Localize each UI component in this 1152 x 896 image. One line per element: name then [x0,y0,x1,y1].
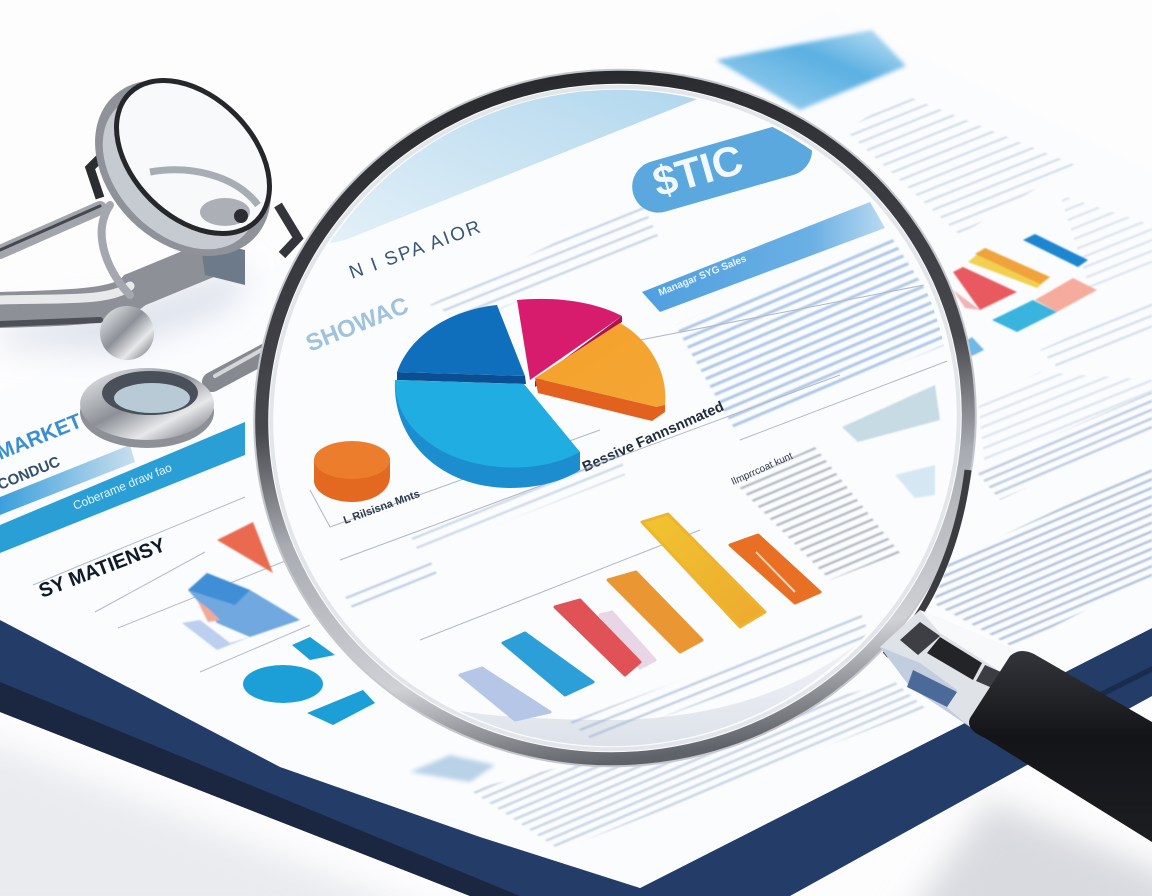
lens: small caption: L Rilsisna Mnts [342,488,422,527]
lens: upper paragraph [430,207,658,316]
text block: middle right [978,372,1152,468]
handle: black grip [969,651,1152,842]
heading: summary: SY MATIENSY [36,534,169,603]
text block: bottom [470,682,925,850]
handle: glass section [880,647,970,727]
folder: right fold line [1000,666,1152,746]
handle: top highlight [920,610,1020,673]
lens: column heading: Ilmprrcoat kunt [730,451,795,488]
lens: caption: Bessive Fannsnmated [580,399,727,476]
lens: ribbon text: Managar SYG Sales [657,253,749,299]
badge: STIC [632,126,812,213]
pie: dark blue slice [397,305,525,376]
folder shadow [0,730,470,896]
icon: small metal ball [100,306,154,360]
banner: light stripe [0,445,135,515]
pie: orange slice [535,323,665,407]
lens: heading: N I SPA AIOR [347,216,485,284]
folder: navy cover [0,620,1152,896]
handle shadow [900,800,1152,896]
text block: under bars [1040,300,1152,372]
lens: guide lines [310,280,950,640]
pie chart [395,299,665,488]
banner text: Coberame draw fao [71,460,174,513]
text block: upper right [845,95,1075,235]
text block: right box [1060,195,1152,290]
pie: cyan slice side [395,380,580,488]
pie: dark blue side [397,372,526,384]
lens: sub heading: SHOWAC [302,292,412,358]
bar chart in lens [460,514,820,720]
summary frame lines [33,497,310,672]
text block: dense lower right [933,465,1152,647]
ornament: bottom [410,755,495,782]
handle: dark band two [927,637,982,680]
handle: dark band three [976,665,1003,690]
stethoscope tubes [0,205,272,382]
handle: dark band one [900,622,940,655]
handle: metal collar base [880,610,1020,727]
pie: cyan slice [395,380,580,468]
header band on page [716,30,906,110]
icon: lower metal chest piece [80,368,214,448]
lens: bottom text rows [570,612,872,742]
stethoscope shadow [0,265,250,350]
lens: sheen at bottom [460,646,854,746]
chart: lower left blue blocks [182,522,300,650]
pie: pink side [535,316,622,387]
lens content [270,40,950,770]
pie: pink slice [517,299,622,380]
folder: dark edge [0,682,520,896]
lens: right faint chart [842,385,940,442]
orange cylinder [314,441,390,502]
badge: blue oval [243,665,323,703]
chart: top right coloured bars [953,234,1097,356]
text block: lower right [975,392,1152,500]
lens: left mini text [345,562,437,608]
handle: navy reflection [907,670,957,707]
lens: blue ribbon [642,202,885,312]
badge: blue fragment [292,637,335,660]
lens glass [219,32,1011,804]
lens: top blue band [330,90,697,244]
icon: upper magnifier ring [60,45,306,291]
lens: blue text columns [675,235,945,430]
handle [880,610,1152,842]
lens: right faint block [895,465,935,498]
lens: caption right column [735,447,900,580]
badge: blue tag [307,690,375,725]
lens: lower text rows [410,450,625,555]
lens rim [209,23,1021,813]
lens: pale corner above band [270,60,420,260]
banner: left blue band [0,422,245,553]
badge: STIC: $TIC [648,135,748,206]
pie: orange slice side [535,378,665,421]
